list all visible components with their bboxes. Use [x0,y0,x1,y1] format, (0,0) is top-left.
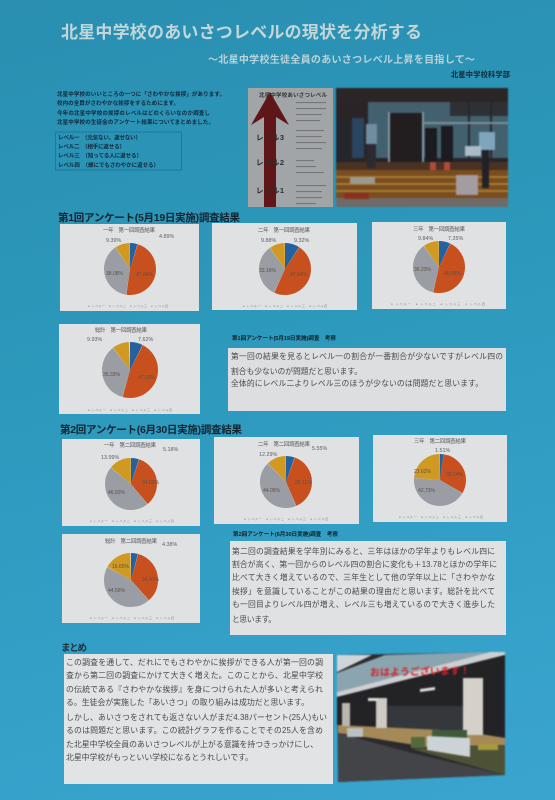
panel: grade 3 first survey pie: ● レベル一 ● レベル二 ● レベル三 ● レベル四 [391,302,485,306]
panel: overall second survey pie: 16.65% [112,564,130,570]
summary text box [64,654,333,784]
first survey discussion text box: 第一回の結果を見るとレベル一の割合が一番割合が少ないですがレベル四の [231,351,503,361]
panel: grade 3 first survey pie: 7.25% [448,236,463,242]
pie chart [427,467,453,493]
level chart poster image: レベル2 [256,158,284,167]
panel: grade 2 second survey pie: 38.11% [295,480,312,486]
heading: summary: まとめ [61,643,87,654]
panel: grade 1 first survey pie: 38.08% [106,271,124,277]
panel: overall second survey pie: 34.41% [142,577,160,583]
second survey discussion text box: と思います。 [232,615,276,624]
intro text: 今年の北星中学校の挨拶のレベルはどのくらいなのか調査し [57,109,210,117]
level definition box [56,132,182,170]
panel: grade 3 second survey pie: 23.62% [414,469,432,475]
summary text box: るのは問題だと思います。この統計グラフを作ることでその25人を含め [66,725,323,735]
panel: overall second survey pie: 44.56% [108,588,126,594]
title: 北星中学校のあいさつレベルの現状を分析する [61,22,422,42]
panel: grade 1 first survey pie: 4.89% [159,234,174,240]
subtitle: ～北星中学校生徒全員のあいさつレベル上昇を目指して～ [208,53,475,66]
panel: overall second survey pie: ● レベル一 ● レベル二 ● レベル三 ● レベル四 [90,616,174,620]
panel: grade 2 second survey pie [214,437,359,524]
panel: grade 1 second survey pie: 5.18% [163,447,178,453]
pie chart [118,471,144,497]
pie chart [116,356,144,384]
panel: overall first survey pie: 7.62% [138,337,153,343]
level definition box: レベル二 （相手に返せる） [58,142,125,150]
second survey discussion heading: 第2回アンケート(6月30日実施)調査 考察 [233,530,338,538]
panel: overall first survey pie [59,324,200,414]
panel: grade 3 first survey pie: 36.23% [414,267,432,273]
panel: overall second survey pie: 総計 第二回調査結果 [105,537,158,545]
summary text box: た北星中学校全員のあいさつレベルが上がる意識を持つきっかけにし、 [66,739,318,749]
second survey discussion text box: 第二回の調査結果を学年別にみると、三年はほかの学年よりもレベル四に [232,546,495,556]
panel: grade 3 second survey pie: 1.51% [435,448,450,454]
panel: grade 2 second survey pie: 12.29% [259,452,277,458]
panel: grade 1 second survey pie: 34.00% [142,480,160,486]
panel: grade 3 second survey pie: ● レベル一 ● レベル二 ● レベル三 ● レベル四 [399,515,483,519]
second survey discussion text box: 割合が高く、第一回からのレベル四の割合に変化も＋13.78とほかの学年に [232,559,497,569]
panel: grade 1 second survey pie [62,439,200,526]
panel: grade 1 second survey pie: 46.83% [108,490,126,496]
panel: grade 2 first survey pie: 33.16% [259,268,277,274]
intro text: 校内の全員がさわやかな挨拶をするためにます。 [57,99,179,107]
summary text box: 査から第二回の調査にかけて大きく増えた。このことから、北星中学校 [66,670,323,680]
level chart poster image: レベル3 [256,133,284,142]
panel: grade 2 second survey pie: 44.05% [263,488,281,494]
intro text: 北星中学校の生徒会のアンケート結果についてまとめました。 [57,118,214,126]
panel: overall first survey pie: 47.12% [138,375,156,381]
level chart poster image [248,88,333,207]
panel: grade 1 first survey pie: 9.39% [106,238,121,244]
pie chart [117,256,143,282]
panel: overall first survey pie: 9.93% [87,337,102,343]
panel: grade 1 first survey pie: 一年 第一回調査結果 [103,226,156,234]
second survey discussion text box [230,541,506,635]
panel: grade 3 first survey pie: 46.68% [444,271,462,277]
panel: grade 3 second survey pie [373,435,507,522]
heading: second survey: 第2回アンケート(6月30日実施)調査結果 [60,423,242,436]
first survey discussion text box: 割合も少ないのが問題だと思います。 [231,366,362,376]
photo: students at school entrance [336,88,508,207]
level definition box: レベル三 （知ってる人に返せる） [58,152,142,160]
summary text box: の伝統である『さわやかな挨拶』を身につけられた人が多いと考えられ [66,684,323,694]
panel: overall first survey pie: ● レベル一 ● レベル二 ● レベル三 ● レベル四 [88,408,172,412]
level definition box: レベル四 （誰にでもさわやかに返せる） [58,161,159,169]
panel: grade 1 second survey pie: 13.99% [101,455,119,461]
author: 北星中学校科学部 [451,70,510,79]
panel: grade 1 first survey pie [60,224,199,311]
panel: grade 2 first survey pie: 47.64% [290,272,308,278]
first survey discussion text box [228,348,506,411]
summary text box: しかし、あいさつをされても返さない人がまだ4.38パーセント(25人)もい [66,712,327,722]
icon: red arrow [251,92,289,207]
intro text: 北星中学校のいいところの一つに「さわやかな挨拶」があります。 [57,90,225,98]
panel: grade 1 second survey pie: ● レベル一 ● レベル二 ● レベル三 ● レベル四 [90,519,174,523]
summary text box: 北星中学校がもっといい学校になるとうれしいです。 [66,752,253,762]
second survey discussion text box: 比べて大きく増えているので、三年生として他の学年以上に「さわやかな [232,572,495,582]
level chart poster image: レベル1 [256,186,284,195]
second survey discussion text box: 挨拶」を意識していることがこの結果の理由だと思います。総計を比べて [232,586,495,596]
panel: overall second survey pie [62,534,200,623]
panel: grade 1 first survey pie: ● レベル一 ● レベル二 ● レベル三 ● レベル四 [88,304,168,308]
panel: grade 3 second survey pie: 42.73% [418,488,436,494]
panel: grade 2 second survey pie: 5.55% [312,446,327,452]
panel: grade 3 first survey pie: 三年 第一回調査結果 [413,225,466,233]
panel: grade 3 second survey pie: 三年 第二回調査結果 [414,437,467,445]
panel: grade 3 first survey pie [372,222,506,309]
first survey discussion text box: 全体的にレベル二よりレベル三のほうが少ないのは問題だと思います。 [231,378,483,388]
photo: school building [337,652,505,782]
panel: grade 1 second survey pie: 一年 第二回調査結果 [104,441,157,449]
summary text box: る。生徒会が実施した「あいさつ」の取り組みは成功だと思います。 [66,697,309,707]
panel: grade 3 second survey pie: 32.14% [446,472,464,478]
intro text [57,90,225,126]
level definition box: レベル一 （元気ない、返せない） [58,134,141,142]
panel: overall second survey pie: 4.38% [162,542,177,548]
panel: grade 2 second survey pie: ● レベル一 ● レベル二 ● レベル三 ● レベル四 [244,517,328,521]
pie chart [272,256,298,282]
panel: grade 2 second survey pie: 二年 第二回調査結果 [258,440,311,448]
panel: overall first survey pie: 総計 第一回調査結果 [95,326,148,334]
photo caption: おはようございます！ [370,664,470,679]
panel: overall first survey pie: 35.33% [103,372,121,378]
panel: grade 3 first survey pie: 9.84% [418,236,433,242]
pie chart [273,469,299,495]
second survey discussion text box: も一回目よりレベル四が増え、レベル三も増えているので大きく進歩した [232,599,495,609]
pie chart [118,566,144,594]
heading: first survey: 第1回アンケート(5月19日実施)調査結果 [58,211,240,224]
panel: grade 2 first survey pie: 9.32% [294,238,309,244]
panel: grade 1 first survey pie: 47.64% [136,272,154,278]
panel: grade 2 first survey pie: ● レベル一 ● レベル二 ● レベル三 ● レベル四 [243,304,327,308]
panel: grade 2 first survey pie: 9.88% [261,238,276,244]
first survey discussion heading: 第1回アンケート(5月19日実施)調査 考察 [232,334,336,342]
panel: grade 2 first survey pie: 二年 第一回調査結果 [258,226,311,234]
level chart poster image: 北星中学校あいさつレベル [259,91,327,99]
summary text box: この調査を通して、だれにでもさわやかに挨拶ができる人が第一回の調 [66,657,323,667]
panel: grade 2 first survey pie [212,223,357,310]
pie chart [426,254,452,280]
